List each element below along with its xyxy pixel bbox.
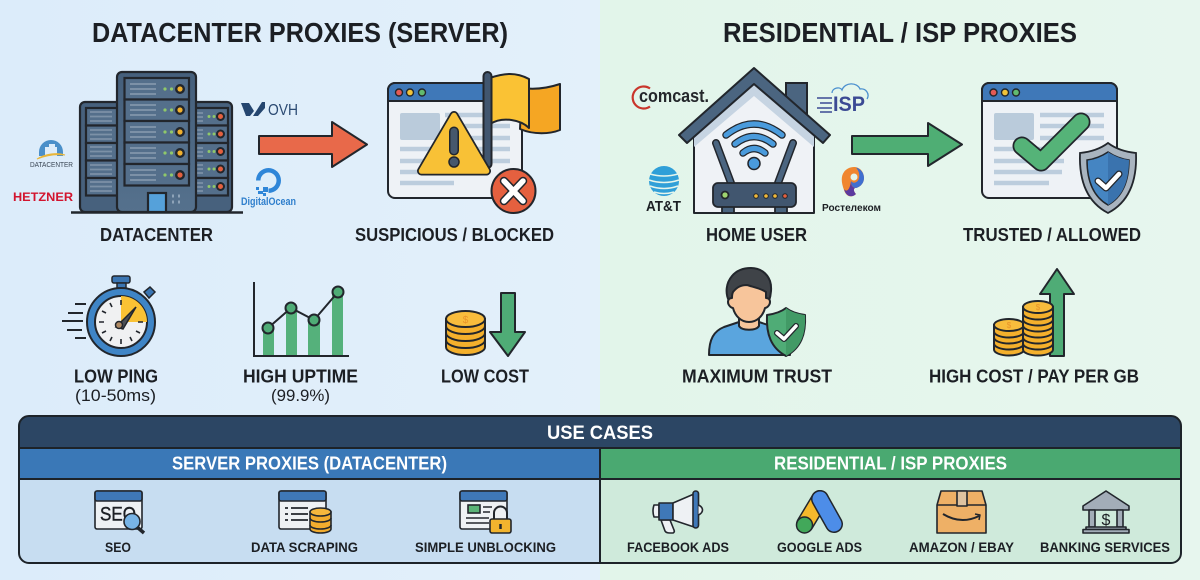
- icon: home with wifi router: [679, 68, 830, 213]
- sub-header: residential proxies: [600, 448, 1181, 479]
- warning triangle: [422, 116, 486, 171]
- logo: isp: ISP: [833, 93, 865, 116]
- heading: use cases: USE CASES: [547, 423, 653, 444]
- router: [713, 143, 796, 213]
- browser window: [982, 83, 1117, 198]
- sub-header: server proxies: [19, 448, 600, 479]
- icon: facebook ads megaphone: [653, 491, 702, 533]
- logo: isp: [817, 84, 868, 116]
- icon: data scraping: [279, 491, 331, 533]
- icon: high cost coins with up arrow: $: [1007, 321, 1012, 330]
- label: home user: HOME USER: [706, 225, 807, 245]
- label: data scraping: DATA SCRAPING: [251, 539, 358, 555]
- logo: ovh: [241, 102, 298, 119]
- label: amazon / ebay: AMAZON / EBAY: [909, 539, 1015, 555]
- label: datacenter: DATACENTER: [100, 225, 213, 245]
- shield: [1080, 143, 1136, 213]
- background: residential side: [600, 0, 1200, 580]
- label: low ping value: (10-50ms): [75, 386, 156, 405]
- icon: simple unblocking: [460, 491, 511, 533]
- panel body: server proxies: [19, 479, 600, 563]
- label: simple unblocking: SIMPLE UNBLOCKING: [415, 539, 556, 555]
- panel: use cases: [19, 416, 1181, 563]
- icon: seo: [95, 491, 144, 533]
- icon: seo: SEO: [100, 504, 136, 526]
- logo: digitalocean: DigitalOcean: [241, 196, 296, 208]
- label: suspicious / blocked: SUSPICIOUS / BLOCKED: [355, 225, 554, 245]
- logo: at&t: AT&T: [646, 199, 681, 215]
- logo: ovh: OVH: [268, 102, 298, 119]
- browser window: [388, 83, 522, 198]
- arrow: home to trusted: [852, 123, 962, 166]
- label: high cost / pay per gb: HIGH COST / PAY PER GB: [929, 366, 1139, 386]
- heading: datacenter proxies: DATACENTER PROXIES (SERVER): [92, 17, 508, 48]
- icon: datacenter server racks: [71, 72, 243, 212]
- heading: residential proxies: RESIDENTIAL / ISP PROXIES: [723, 17, 1077, 48]
- arrow: datacenter to blocked: [259, 122, 367, 167]
- icon: stopwatch: [62, 276, 155, 356]
- heading: server proxies datacenter: SERVER PROXIES (DATACENTER): [172, 454, 447, 474]
- icon: suspicious browser window with flag: [388, 72, 560, 213]
- flag: [484, 72, 560, 168]
- icon: trusted browser window with shield: [982, 83, 1136, 213]
- label: low cost: LOW COST: [441, 366, 529, 386]
- icon: high cost coins with up arrow: $: [1036, 303, 1041, 312]
- panel body: residential proxies: [600, 479, 1181, 563]
- label: banking services: BANKING SERVICES: [1040, 539, 1170, 555]
- heading: residential isp proxies: RESIDENTIAL / ISP PROXIES: [774, 454, 1007, 474]
- logo: datacenter badge: DATACENTER: [30, 160, 73, 169]
- label: low ping: LOW PING: [74, 366, 158, 386]
- icon: google ads logo: [796, 499, 834, 533]
- logo: rostelecom: Ростелеком: [822, 203, 881, 214]
- label: google ads: GOOGLE ADS: [777, 539, 862, 555]
- icon: bank: [1083, 491, 1129, 533]
- logo: rostelecom: [822, 167, 881, 214]
- icon: low cost coins with down arrow: [446, 293, 525, 356]
- chart: high uptime: [254, 282, 349, 356]
- icon: bank: $: [1102, 512, 1111, 529]
- panel header bar: [19, 416, 1181, 448]
- icon: user with shield: [709, 268, 805, 356]
- wifi symbol: [726, 124, 782, 170]
- background: datacenter side: [0, 0, 600, 580]
- icon: low cost coins with down arrow: $: [463, 315, 469, 326]
- label: high uptime value: (99.9%): [271, 386, 330, 405]
- blocked badge: [492, 169, 536, 213]
- logo: hetzner: HETZNER: [13, 192, 74, 204]
- logo: digitalocean: [241, 168, 296, 208]
- icon: amazon box: [937, 491, 986, 533]
- label: maximum trust: MAXIMUM TRUST: [682, 366, 832, 386]
- label: high uptime: HIGH UPTIME: [243, 366, 358, 386]
- label: trusted / allowed: TRUSTED / ALLOWED: [963, 225, 1141, 245]
- label: facebook ads: FACEBOOK ADS: [627, 539, 729, 555]
- logo: at&t: [646, 166, 681, 215]
- logo: comcast: comcast.: [639, 85, 709, 106]
- icon: high cost coins with up arrow: [994, 269, 1074, 356]
- logo: datacenter badge: [30, 140, 73, 169]
- label: seo: SEO: [105, 539, 131, 555]
- check mark: [1022, 122, 1081, 162]
